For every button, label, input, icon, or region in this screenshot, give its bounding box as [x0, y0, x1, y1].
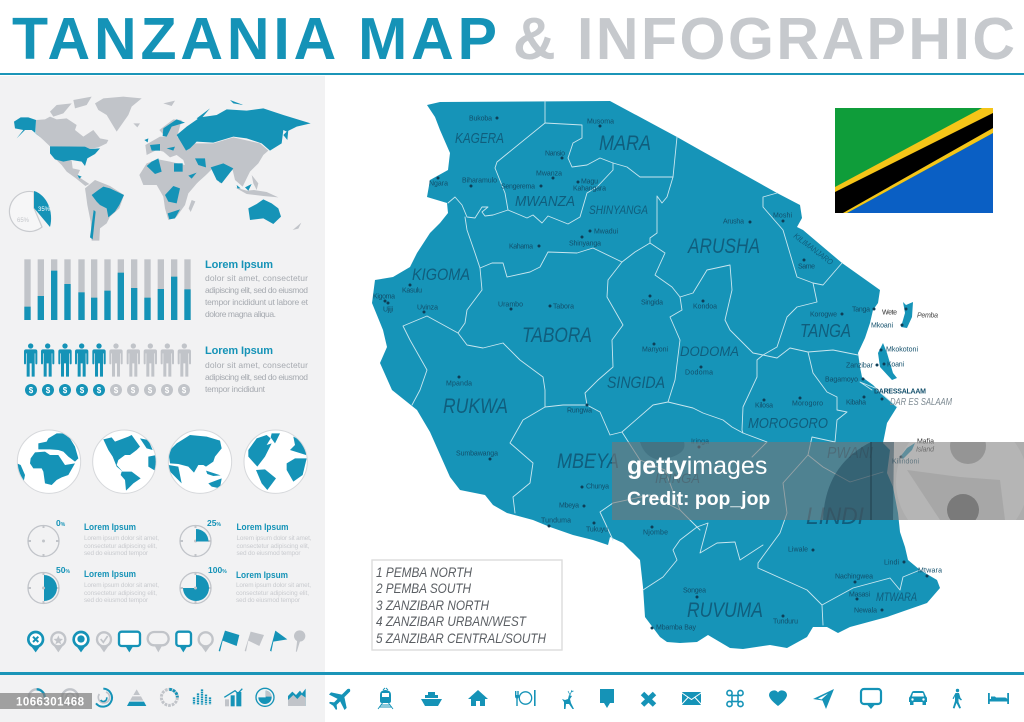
text block: bar chart description: [205, 259, 309, 319]
city: Rungwa: Rungwa: [567, 408, 592, 414]
city: Kilosa: Kilosa: [755, 402, 773, 410]
text: gauge 25%: Lorem ipsum dolor sit amet,: [236, 535, 312, 542]
text: gauge 50%: [84, 569, 159, 604]
text block: people description: dolor sit amet, consectetur: [205, 360, 308, 370]
icon: plate and cutlery: [515, 690, 536, 706]
text block: bar chart description: adipiscing elit, sed do eiusmod: [205, 285, 308, 295]
legend box: 5 ZANZIBAR CENTRAL/SOUTH: [376, 630, 547, 646]
icon: grey pin with check: [97, 632, 111, 652]
city: Mbamba Bay: Mbamba Bay: [656, 624, 696, 632]
region: Mtwara: MTWARA: [876, 590, 917, 604]
header rule: [0, 73, 1024, 75]
city: Zanzibar: Zanzibar: [846, 362, 874, 370]
city: Tukuyu: Tukuyu: [586, 526, 608, 534]
icon: equalizer bars: [194, 689, 210, 705]
people pictogram row: [24, 343, 191, 377]
city: Nachingwea: Nachingwea: [835, 574, 873, 580]
text block: bar chart description: dolor sit amet, consectetur: [205, 273, 308, 283]
city: Kigoma: Kigoma: [373, 294, 395, 300]
dollar coin row: $: [114, 386, 119, 395]
city: Kibaha: [846, 396, 866, 406]
label: Mafia Island: Island: [916, 446, 935, 454]
city: Njombe: Njombe: [643, 530, 668, 536]
icon: bed: [988, 693, 1009, 704]
region: Tanga: TANGA: [800, 321, 851, 341]
city: Bukoba: Bukoba: [469, 116, 492, 122]
city: Njombe: [643, 526, 668, 536]
city: Same: Same: [798, 264, 815, 270]
stacked bar chart: [24, 259, 191, 320]
dollar coin row: $: [148, 386, 153, 395]
bottom pictogram row: [325, 681, 1009, 714]
icon: command symbol: [727, 690, 743, 707]
text: gauge 0%: sed do eiusmod tempor: [84, 550, 149, 557]
icon: teal pin with cross: [28, 632, 43, 652]
city: Rungwa: [567, 404, 592, 414]
text block: people description: tempor incididunt: [205, 384, 266, 394]
text: gauge 50%: sed do eiusmod tempor: [84, 597, 149, 604]
map of Tanzania: [372, 101, 940, 649]
icon: dotted ring: [161, 689, 177, 705]
globe: Americas: [93, 430, 157, 493]
globe: Africa and Europe: [17, 430, 81, 493]
icon: speech bubble: [861, 689, 881, 709]
city: Musoma: Musoma: [587, 118, 614, 126]
world map: [14, 97, 311, 241]
city: Urambo: Urambo: [498, 302, 523, 308]
city: Mwadui: Mwadui: [594, 228, 618, 236]
city: Ngara: Ngara: [429, 180, 448, 188]
city: Kilindoni: [892, 456, 919, 466]
city: Chunya: Chunya: [586, 484, 609, 490]
icon: house: [468, 690, 488, 706]
watermark band: [612, 442, 1024, 520]
city: Nansio: Nansio: [545, 150, 565, 158]
city: Tukuyu: [586, 522, 608, 534]
icon: grey oval bubble: [148, 632, 169, 652]
text: gauge 0%: consectetur adipiscing elit,: [84, 543, 157, 550]
region: Dar es Salaam: DAR ES SALAAM: [890, 397, 953, 408]
city: Songea: Songea: [683, 588, 706, 594]
city: Tunduma: Tunduma: [541, 518, 571, 524]
island: Pemba: [901, 302, 913, 328]
city: Mkokotoni: Mkokotoni: [886, 346, 918, 354]
icon: teal pennant: [270, 631, 287, 652]
city: Sumbawanga: [456, 450, 498, 460]
city: Moshi: [773, 212, 792, 222]
city: Kibaha: Kibaha: [846, 400, 866, 406]
icon: grey pin with star: [51, 632, 65, 652]
icon: walking person: [952, 689, 962, 708]
city: Songea: [683, 588, 706, 598]
image ID strip: [0, 693, 92, 709]
icon: cross: [642, 694, 654, 705]
text: gauge 50%: Lorem Ipsum: [84, 569, 136, 580]
city: Kahama: Kahama: [509, 244, 533, 250]
country shape: [372, 101, 940, 649]
city: Koani: Koani: [887, 362, 904, 368]
region: Rukwa: RUKWA: [443, 395, 508, 418]
region labels: [412, 130, 917, 622]
city: Tunduru: Tunduru: [773, 618, 798, 626]
globe: Atlantic: [244, 430, 307, 493]
icon: teal square bubble: [176, 632, 191, 652]
gauge: 25%: [180, 518, 221, 557]
city: Ujiji: Ujiji: [383, 306, 393, 314]
city: Uvinza: Uvinza: [417, 304, 438, 312]
city markers and names: [373, 116, 953, 632]
gauge: 0%: [28, 518, 66, 557]
icon: grey flag: [245, 632, 264, 652]
city: Tunduru: [773, 614, 798, 626]
text: gauge 0%: [84, 522, 159, 557]
city: Same: [798, 258, 815, 270]
text: gauge 100%: consectetur adipiscing elit,: [236, 590, 309, 597]
gauge: 0%: 0%: [56, 518, 66, 528]
city: Shinyanga: [569, 236, 601, 248]
text: gauge 0%: Lorem Ipsum: [84, 522, 136, 533]
city: Kilindoni: Kilindoni: [892, 458, 919, 466]
icon: area chart: [288, 689, 306, 706]
region: Iringa: IRINGA: [655, 470, 700, 486]
region: Mwanza: MWANZA: [515, 194, 575, 210]
legend box: 3 ZANZIBAR NORTH: [376, 597, 490, 613]
icon: teal rectangular bubble: [119, 632, 140, 652]
island: Mafia: [900, 443, 915, 459]
gauge: 100%: 100%: [208, 565, 227, 575]
text block: bar chart description: tempor incididunt ut labore et: [205, 297, 309, 307]
icon: paper plane: [813, 689, 834, 709]
region: Kigoma: KIGOMA: [412, 265, 470, 284]
gauge: 50%: 50%: [56, 565, 70, 575]
icon: bar chart with arrow: [224, 689, 242, 706]
icon: pie: [256, 688, 274, 706]
icon: pyramid: [127, 689, 146, 706]
city: Dar es Salaam: DARESSALAAM: [874, 388, 926, 396]
pie chart: 35% / 65%: 35%: [38, 207, 51, 213]
dollar coin row: $: [165, 386, 170, 395]
pie chart: 35% / 65%: 65%: [17, 218, 30, 224]
icon: car: [909, 691, 927, 705]
city: Nachingwea: [835, 574, 873, 584]
city: Kasulu: Kasulu: [402, 288, 422, 294]
city: Mpanda: [446, 376, 472, 388]
region: Kilimanjaro: KILIMANJARO: [792, 231, 835, 267]
text block: bar chart description: dolore magna aliqua.: [205, 309, 276, 319]
icon: heart: [769, 690, 787, 706]
city: Ngara: [429, 176, 448, 188]
gauge: 25%: 25%: [207, 518, 221, 528]
region: Dodoma: DODOMA: [680, 343, 739, 359]
icon: grey map pin: [294, 630, 305, 652]
label: Mafia Island: Mafia: [917, 438, 934, 446]
city: Sengerema: Sengerema: [501, 184, 535, 190]
legend box: 4 ZANZIBAR URBAN/WEST: [376, 613, 527, 629]
city: Mkoani: Mkoani: [871, 322, 893, 330]
city: Mtwara: Mtwara: [918, 568, 942, 574]
city: Mkoani: [871, 322, 904, 330]
text: gauge 0%: Lorem ipsum dolor sit amet,: [84, 535, 159, 542]
dollar coin row: [25, 384, 190, 396]
city: Kilosa: [755, 398, 773, 410]
city: Tanga: Tanga: [852, 306, 870, 314]
city: Tabora: Tabora: [553, 304, 574, 310]
globes: [17, 430, 307, 493]
region: Shinyanga: SHINYANGA: [589, 203, 648, 217]
region: Pwani: PWANI: [827, 445, 873, 462]
island: Zanzibar: [878, 343, 897, 380]
city: Iringa: [691, 438, 709, 448]
gauge: 100%: [180, 565, 227, 604]
city: Mpanda: Mpanda: [446, 380, 472, 388]
city: Moshi: Moshi: [773, 212, 792, 220]
city: Tunduma: [541, 518, 571, 528]
globe: Asia and Australia: [168, 430, 232, 493]
icon: ring 2: [62, 689, 78, 705]
city: Manyoni: [642, 342, 668, 354]
title: TANZANIA MAP: [12, 6, 497, 72]
city: Liwale: Liwale: [788, 546, 808, 554]
label: Mafia Island: [916, 438, 935, 454]
icon: plane: [325, 681, 358, 714]
text block: people description: adipiscing elit, sed do eiusmod: [205, 372, 308, 382]
pie chart: 35% / 65%: [9, 191, 51, 231]
city: Dodoma: [685, 366, 713, 376]
city: Kahangara: Kahangara: [573, 186, 606, 192]
icon: teal pin with dot: [74, 632, 88, 652]
city: Magu: Magu: [581, 178, 598, 186]
icon: ring 1: [29, 689, 45, 705]
label: Pemba: Pemba: [917, 312, 938, 320]
text: gauge 25%: sed do eiusmod tempor: [236, 550, 301, 557]
icon: concentric ring: [96, 689, 112, 707]
dollar coin row: $: [97, 386, 102, 395]
title: [12, 6, 1015, 72]
icon: envelope: [682, 692, 701, 705]
icon: ship: [421, 692, 442, 706]
icon: grey round pin: [199, 632, 213, 652]
dollar coin row: $: [131, 386, 136, 395]
city: Korogwe: Korogwe: [810, 312, 837, 318]
text block: people description: Lorem Ipsum: [205, 345, 273, 357]
city: Kondoa: Kondoa: [693, 304, 717, 310]
city: Dar es Salaam: [874, 388, 926, 400]
city: Arusha: Arusha: [723, 218, 744, 226]
region: Kagera: KAGERA: [455, 130, 504, 147]
icon: teal flag: [219, 631, 239, 652]
city: Dodoma: Dodoma: [685, 370, 713, 376]
city: Lindi: [884, 560, 906, 566]
region: Singida: SINGIDA: [607, 373, 665, 392]
legend box: [372, 560, 562, 650]
city: Manyoni: Manyoni: [642, 346, 668, 354]
bottom left chart icons: [29, 688, 306, 707]
dollar coin row: $: [29, 386, 34, 395]
icon: train: [378, 688, 393, 709]
city: Kasulu: [402, 284, 422, 294]
icon: square pin: [600, 689, 614, 708]
region: Mara: MARA: [599, 132, 651, 155]
text: gauge 50%: Lorem ipsum dolor sit amet,: [84, 582, 159, 589]
city: Masasi: Masasi: [849, 592, 870, 598]
flag of Tanzania: [835, 108, 993, 213]
city: Lindi: Lindi: [884, 560, 899, 566]
city: Iringa: Iringa: [691, 438, 709, 446]
city: Newala: Newala: [854, 608, 877, 614]
watermark credit: Credit: pop_jop: [627, 488, 770, 510]
city: Mtwara: [918, 568, 942, 578]
city: Wete: Wete: [882, 310, 897, 316]
legend box: 2 PEMBA SOUTH: [375, 580, 472, 596]
dollar coin row: $: [63, 386, 68, 395]
city: Kondoa: [693, 300, 717, 310]
text: gauge 100%: [236, 570, 311, 604]
region: Mbeya: MBEYA: [557, 450, 619, 473]
dollar coin row: $: [80, 386, 85, 395]
text: gauge 50%: consectetur adipiscing elit,: [84, 590, 157, 597]
region: Tabora: TABORA: [522, 324, 592, 347]
text: gauge 25%: consectetur adipiscing elit,: [236, 543, 310, 550]
city: Wete: [882, 308, 908, 316]
region: Arusha: ARUSHA: [686, 235, 760, 258]
pins, bubbles and flags row: [28, 630, 305, 652]
image ID strip: 1066301468: [16, 696, 85, 708]
text block: bar chart description: Lorem Ipsum: [205, 259, 273, 271]
city: Shinyanga: Shinyanga: [569, 240, 601, 248]
city: Biharamulo: Biharamulo: [462, 178, 497, 184]
city: Singida: Singida: [641, 300, 663, 306]
city: Biharamulo: [462, 178, 497, 188]
city: Morogoro: Morogoro: [792, 400, 823, 408]
city: Mbeya: Mbeya: [559, 502, 579, 510]
text: gauge 25%: Lorem Ipsum: [236, 522, 288, 533]
dollar coin row: $: [46, 386, 51, 395]
text: gauge 100%: Lorem ipsum dolor sit amet,: [236, 582, 311, 589]
region: Morogoro: MOROGORO: [748, 415, 828, 432]
legend box: 1 PEMBA NORTH: [376, 564, 473, 580]
dollar coin row: $: [182, 386, 187, 395]
watermark logo text: gettyimages: [627, 452, 767, 480]
city: Bagamoyo: Bagamoyo: [825, 376, 858, 384]
region: Lindi: LINDI: [806, 503, 864, 530]
icon: deer: [562, 690, 574, 709]
region: Ruvuma: RUVUMA: [687, 599, 763, 622]
title: & INFOGRAPHIC: [513, 6, 1015, 72]
footer rule: [0, 672, 1024, 675]
city: Sumbawanga: Sumbawanga: [456, 450, 498, 458]
city: Mwanza: Mwanza: [536, 170, 562, 178]
text: gauge 100%: sed do eiusmod tempor: [236, 597, 301, 604]
regional boundaries: [403, 101, 920, 625]
left panel background: [0, 76, 325, 722]
text: gauge 25%: [236, 522, 312, 557]
city: Singida: [641, 294, 663, 306]
city: Ujiji: [383, 302, 393, 314]
gauge: 50%: [28, 565, 70, 604]
city: Morogoro: [792, 396, 823, 408]
text block: people description: [205, 345, 308, 394]
text: gauge 100%: Lorem Ipsum: [236, 570, 288, 581]
